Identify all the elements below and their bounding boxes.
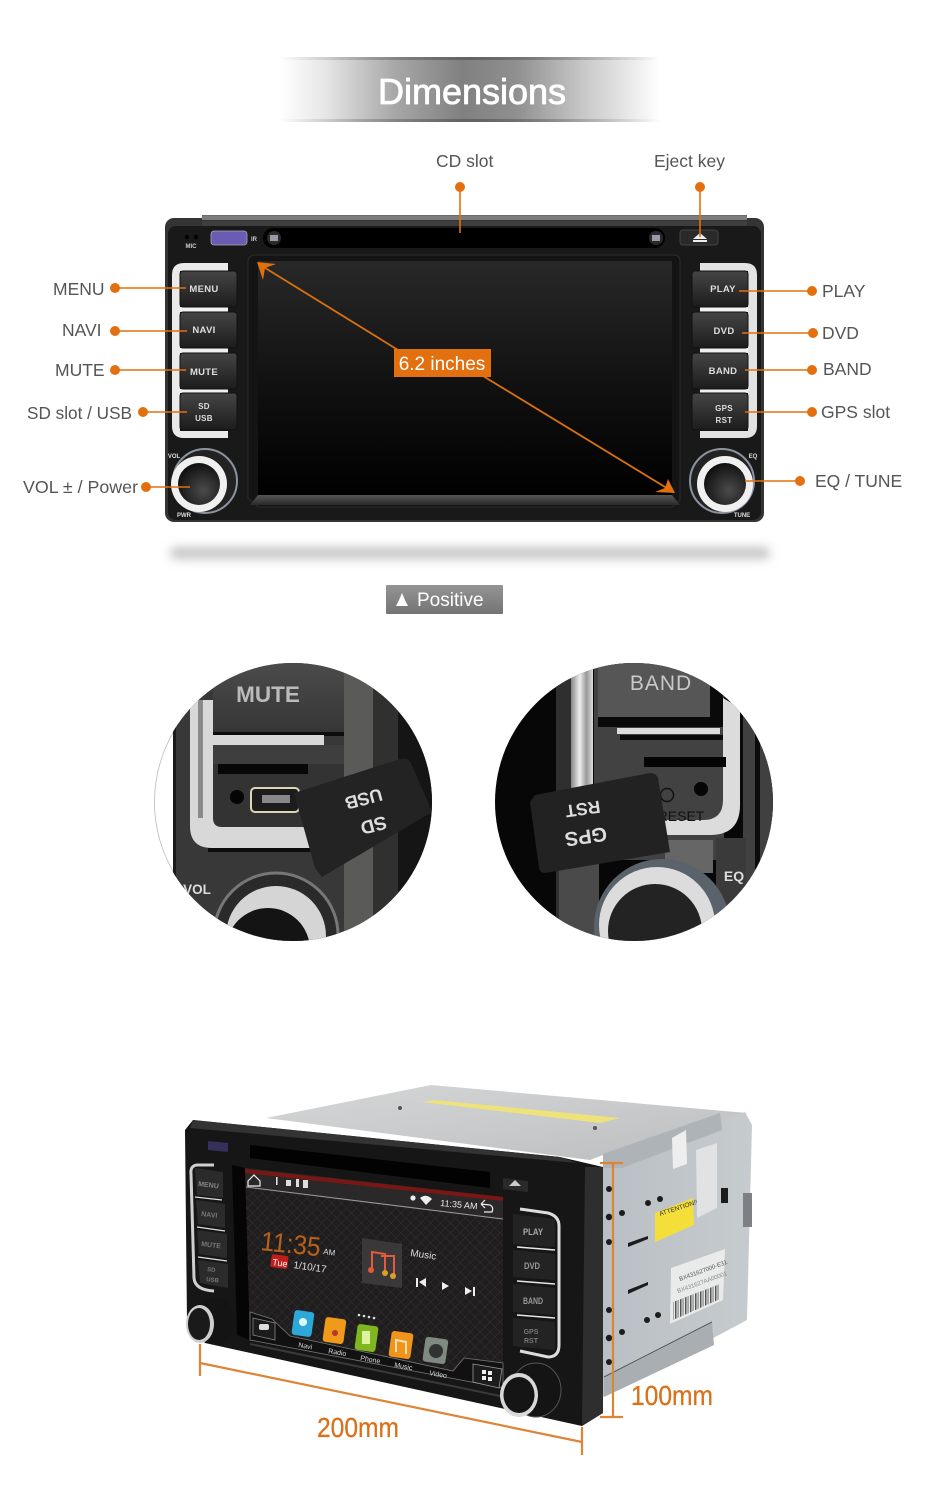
button: SD USB xyxy=(180,393,237,430)
flap: SD USB: USB xyxy=(343,784,385,813)
card slot xyxy=(644,757,726,767)
right buttons and chrome xyxy=(513,1209,559,1357)
label: Eject key: Eject key xyxy=(654,151,725,171)
tag: Positive xyxy=(386,585,503,614)
left buttons and chrome xyxy=(191,1165,228,1291)
button: SD USB: SD xyxy=(198,402,210,411)
callout: 6.2 inches xyxy=(394,349,491,377)
app: Navi: Navi xyxy=(298,1342,313,1351)
status time: 11:35 AM xyxy=(440,1198,478,1211)
heading: Dimensions: Dimensions xyxy=(378,71,566,112)
barcode sticker xyxy=(670,1249,729,1324)
label: PLAY xyxy=(739,281,866,301)
CD slot xyxy=(250,1145,490,1188)
label: BAND: BAND xyxy=(823,359,872,379)
button: NAVI xyxy=(180,312,237,348)
IR window xyxy=(208,1141,228,1152)
app: Phone xyxy=(354,1324,381,1366)
indicator hole xyxy=(230,790,244,804)
eject key xyxy=(503,1178,528,1192)
app: Phone: Phone xyxy=(360,1355,381,1366)
label: PLAY: PLAY xyxy=(822,281,866,301)
left chrome separators xyxy=(180,307,228,393)
dimension: 200mm xyxy=(200,1344,582,1455)
circle detail: SD / USB flap xyxy=(173,663,432,941)
label: VOL / Power xyxy=(23,477,190,497)
label: GPS slot xyxy=(745,402,890,422)
icon: back arrow xyxy=(481,1200,493,1212)
right buttons and chrome: RST xyxy=(524,1338,539,1345)
left chrome button frame xyxy=(172,263,228,438)
USB port xyxy=(251,788,299,812)
button: NAVI: NAVI xyxy=(192,325,216,336)
button: MUTE xyxy=(180,353,237,389)
VOL knob xyxy=(215,872,340,941)
label: SD slot / USB: SD slot / USB xyxy=(27,403,132,423)
right buttons and chrome: BAND xyxy=(523,1296,543,1307)
right buttons and chrome: GPS xyxy=(524,1329,539,1336)
MIC indicator: MIC xyxy=(186,244,197,250)
TUNE knob xyxy=(594,859,726,941)
knob: TUNE: TUNE xyxy=(734,513,750,519)
dimension: 200mm: 200mm xyxy=(317,1412,399,1443)
BAND button: BAND xyxy=(630,672,692,695)
date: 1/10/17 xyxy=(293,1260,328,1276)
flap: SD USB: SD xyxy=(358,811,389,838)
knob: left xyxy=(186,1298,234,1344)
button: MENU xyxy=(180,271,237,307)
app: Radio: Radio xyxy=(328,1348,347,1358)
BAND button xyxy=(598,660,710,717)
button: GPS RST xyxy=(692,393,748,430)
clock AM: AM xyxy=(323,1247,336,1258)
grid label xyxy=(696,1143,717,1218)
chrome bar xyxy=(571,669,593,788)
button: DVD xyxy=(692,312,748,348)
page dots xyxy=(358,1314,375,1319)
diagonal arrow: screen size xyxy=(257,262,675,493)
knob: right xyxy=(500,1363,561,1417)
app: Video: Video xyxy=(429,1370,447,1380)
music album tile xyxy=(362,1238,402,1288)
panel: head unit front view xyxy=(165,215,764,522)
flap: SD USB xyxy=(294,758,432,877)
top flange xyxy=(603,1113,722,1168)
right chrome separators xyxy=(700,307,748,393)
service sticker xyxy=(672,1130,687,1169)
flap: GPS RST: GPS xyxy=(563,822,608,850)
top lid xyxy=(266,1085,747,1160)
right buttons and chrome: DVD xyxy=(524,1261,540,1272)
IR window: IR xyxy=(251,237,258,243)
flap: GPS RST: RST xyxy=(564,797,602,821)
media controls xyxy=(416,1278,475,1296)
label: MENU xyxy=(53,279,186,299)
button: apps grid xyxy=(473,1364,502,1388)
app: Music: Music xyxy=(394,1362,413,1372)
label: DVD xyxy=(742,323,859,343)
label: GPS slot: GPS slot xyxy=(821,402,890,422)
left buttons and chrome: MUTE xyxy=(201,1241,222,1250)
date badge: Tue xyxy=(272,1257,288,1269)
icon: location and wifi xyxy=(410,1195,432,1205)
reset hole: RESET xyxy=(658,808,705,824)
date badge xyxy=(270,1254,289,1269)
CD slot opening xyxy=(263,228,665,248)
app: Radio xyxy=(322,1317,347,1358)
MUTE button: MUTE xyxy=(236,682,300,707)
button: BAND xyxy=(692,353,748,389)
MUTE button xyxy=(213,663,344,702)
label: SD slot / USB xyxy=(27,403,187,423)
yellow warning sticker xyxy=(655,1198,699,1242)
button: DVD: DVD xyxy=(714,326,734,337)
heading: Dimensions xyxy=(280,57,660,122)
flap: GPS RST xyxy=(530,773,670,873)
reset hole xyxy=(660,782,708,821)
label: EQ / TUNE xyxy=(745,471,902,491)
label: CD slot: CD slot xyxy=(436,151,494,171)
button: GPS RST: RST xyxy=(716,416,732,425)
circle detail: GPS / RST flap xyxy=(495,663,773,941)
clock: 11:35 xyxy=(259,1226,322,1262)
eject key xyxy=(680,230,718,245)
label: VOL / Power: VOL ± / Power xyxy=(23,477,138,497)
label: NAVI xyxy=(62,320,187,340)
knob: VOL xyxy=(168,449,237,519)
knob: VOL: VOL xyxy=(168,454,180,460)
button: PLAY: PLAY xyxy=(710,284,736,295)
knob: VOL: PWR xyxy=(177,513,192,519)
IR window xyxy=(211,231,258,245)
knob: TUNE xyxy=(690,449,758,519)
button: BAND: BAND xyxy=(709,366,737,377)
app: Navi xyxy=(291,1310,315,1351)
circle outline xyxy=(154,664,432,940)
status bar xyxy=(245,1168,503,1220)
label: MUTE: MUTE xyxy=(55,360,105,380)
status icons xyxy=(276,1177,308,1188)
card slot xyxy=(218,764,308,774)
button: GPS RST: GPS xyxy=(715,404,733,413)
left buttons and chrome: USB xyxy=(206,1277,220,1285)
button: car xyxy=(253,1318,275,1340)
chrome trim xyxy=(190,700,330,848)
label: Eject key xyxy=(654,151,725,237)
callout: 6.2 inches: 6.2 inches xyxy=(399,354,485,375)
right buttons and chrome: PLAY xyxy=(523,1227,544,1238)
button: MUTE: MUTE xyxy=(190,367,218,378)
mounting holes xyxy=(606,1186,728,1365)
chrome trim xyxy=(617,698,740,835)
icon: home xyxy=(248,1175,260,1186)
dimension: 100mm xyxy=(600,1163,713,1417)
screen xyxy=(258,261,672,495)
tag: Positive: Positive xyxy=(417,590,484,611)
VOL label: VOL xyxy=(183,882,211,897)
app: Video xyxy=(422,1336,449,1380)
button: SD USB: USB xyxy=(195,414,213,423)
left buttons and chrome: NAVI xyxy=(201,1211,218,1220)
label: CD slot xyxy=(436,151,494,233)
side chassis xyxy=(603,1112,752,1397)
right chrome button frame xyxy=(700,263,757,438)
screen xyxy=(245,1168,503,1388)
front bezel xyxy=(185,1120,603,1426)
left pillar xyxy=(232,1165,250,1340)
yellow warning sticker: ATTENTION!! xyxy=(658,1199,699,1218)
dock bar xyxy=(250,1312,503,1388)
label: DVD: DVD xyxy=(822,323,859,343)
panel: head unit 3D view xyxy=(185,1085,752,1426)
barcode sticker: BX431627AA00001 xyxy=(677,1271,729,1295)
button: PLAY xyxy=(692,271,748,307)
label: NAVI: NAVI xyxy=(62,320,102,340)
left buttons and chrome: MENU xyxy=(198,1181,219,1190)
label: MUTE xyxy=(55,360,186,380)
button: MENU: MENU xyxy=(189,284,219,295)
knob: TUNE: EQ xyxy=(749,454,758,460)
MIC indicator xyxy=(185,235,198,250)
bezel lower line xyxy=(250,1344,500,1396)
right tab xyxy=(743,1193,752,1227)
label: EQ / TUNE: EQ / TUNE xyxy=(815,471,902,491)
barcode sticker: BX431627000-E31 xyxy=(679,1260,729,1283)
app: Music xyxy=(388,1331,414,1372)
label: MENU: MENU xyxy=(53,279,105,299)
EQ label: EQ xyxy=(724,868,744,884)
screen bezel xyxy=(248,255,680,507)
lower rail xyxy=(604,1323,714,1397)
dimension: 100mm: 100mm xyxy=(631,1380,713,1411)
label: BAND xyxy=(745,359,872,379)
product shadow xyxy=(170,547,770,559)
music title: Music xyxy=(410,1248,437,1263)
left buttons and chrome: SD xyxy=(207,1267,216,1274)
